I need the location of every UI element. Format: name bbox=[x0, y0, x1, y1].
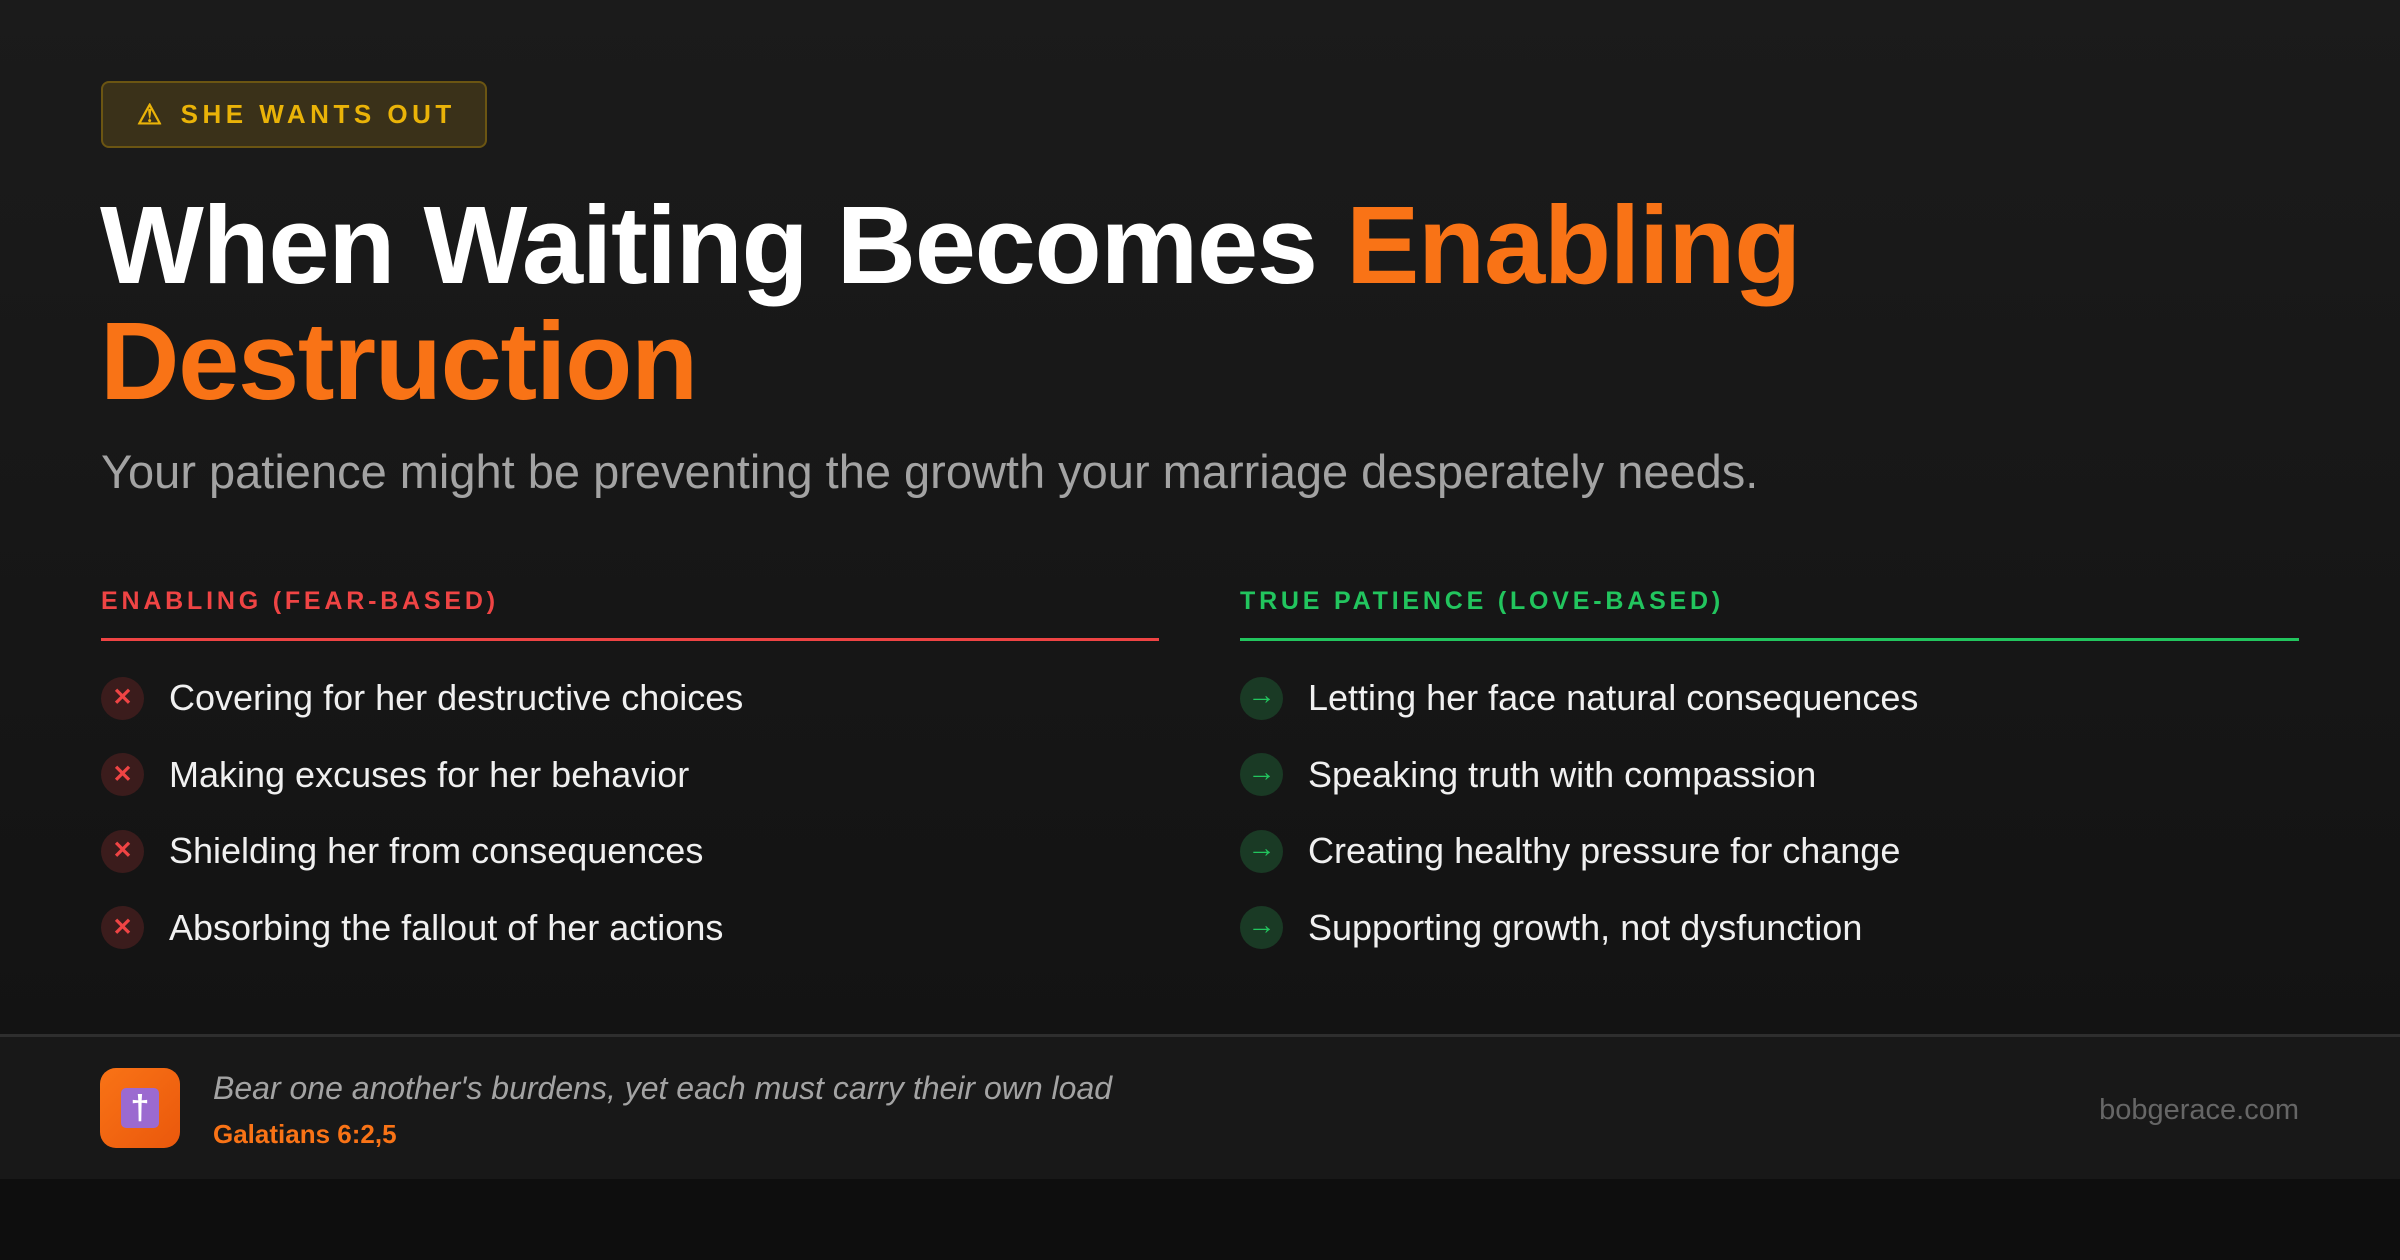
list: enabling items: ✕ bbox=[112, 760, 133, 788]
list: patience items: Creating healthy pressure for change bbox=[1308, 830, 1900, 871]
list: patience items: → bbox=[1248, 908, 1276, 940]
list: enabling items: ✕ bbox=[112, 684, 133, 711]
list: enabling items: Making excuses for her behavior bbox=[169, 754, 689, 794]
reference: Galatians 6:2,5 bbox=[213, 1119, 397, 1149]
list: enabling items: ✕ bbox=[112, 914, 133, 940]
badge: SHE WANTS OUT bbox=[181, 99, 456, 129]
list: enabling items: Shielding her from consequences bbox=[169, 830, 703, 871]
badge bbox=[101, 81, 487, 148]
icon: cross bbox=[100, 1068, 180, 1148]
list: enabling items bbox=[101, 677, 743, 949]
title bbox=[100, 184, 1800, 423]
list: enabling items: ✕ bbox=[112, 837, 133, 864]
list: patience items: Letting her face natural consequences bbox=[1308, 677, 1918, 718]
title: When Waiting Becomes Enabling bbox=[100, 184, 1800, 307]
list: patience items: → bbox=[1248, 832, 1276, 863]
list: enabling items: Covering for her destructive choices bbox=[169, 677, 743, 718]
subtitle: Your patience might be preventing the growth your marriage desperately needs. bbox=[101, 445, 1758, 498]
list: patience items: → bbox=[1248, 756, 1276, 786]
list: patience items: Supporting growth, not dysfunction bbox=[1308, 906, 1862, 948]
quote: Bear one another's burdens, yet each must carry their own load bbox=[213, 1070, 1112, 1106]
title: Destruction bbox=[100, 300, 697, 423]
heading: enabling: ENABLING (FEAR-BASED) bbox=[101, 587, 499, 615]
list: patience items bbox=[1240, 677, 1918, 949]
panel: enabling bbox=[101, 587, 1159, 949]
icon: cross: † bbox=[131, 1088, 149, 1126]
heading: true patience: TRUE PATIENCE (LOVE-BASED) bbox=[1240, 587, 1724, 615]
badge: ⚠ bbox=[137, 99, 167, 130]
list: enabling items: Absorbing the fallout of her actions bbox=[169, 906, 723, 948]
panel: true patience bbox=[1240, 587, 2299, 949]
list: patience items: Speaking truth with compassion bbox=[1308, 754, 1816, 794]
list: patience items: → bbox=[1248, 679, 1276, 710]
footer bbox=[0, 1034, 2400, 1179]
website: bobgerace.com bbox=[2099, 1094, 2299, 1126]
